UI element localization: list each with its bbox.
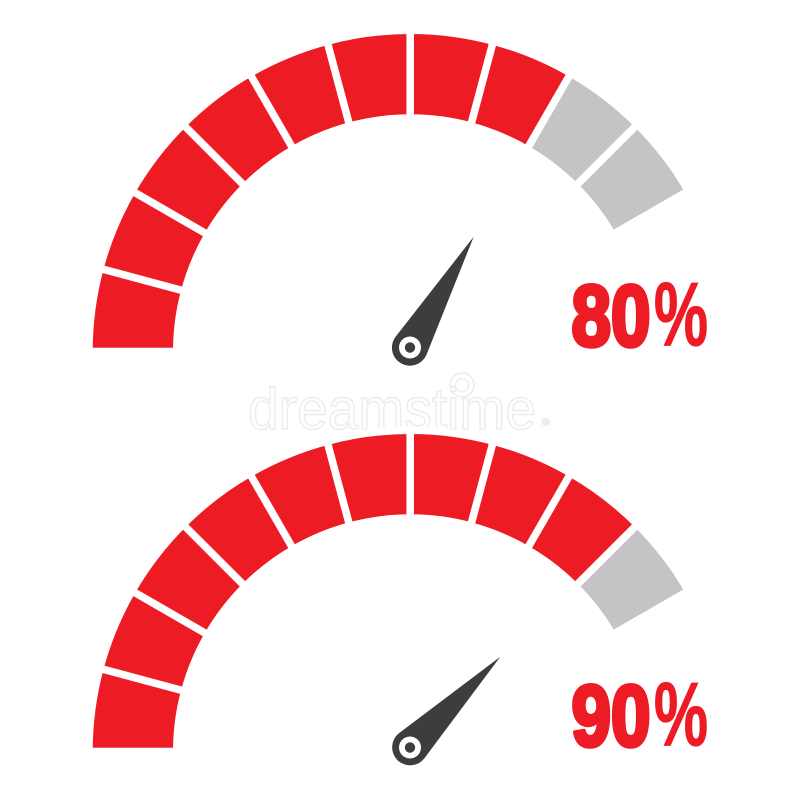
value: 90%: 90 xyxy=(572,668,650,764)
gauge: 90 percent xyxy=(89,420,708,766)
value: 80%: 80 xyxy=(572,268,650,364)
needle: 80 percent xyxy=(392,237,474,366)
value: 90%: % xyxy=(654,666,708,766)
dial segments: 8 red, 2 grey xyxy=(89,20,696,352)
watermark: dreamstime xyxy=(248,377,536,442)
dial segments: 9 red, 1 grey xyxy=(89,420,696,752)
gauge: 80 percent xyxy=(89,20,708,366)
needle: 90 percent xyxy=(392,657,500,765)
value: 80%: % xyxy=(654,266,708,366)
